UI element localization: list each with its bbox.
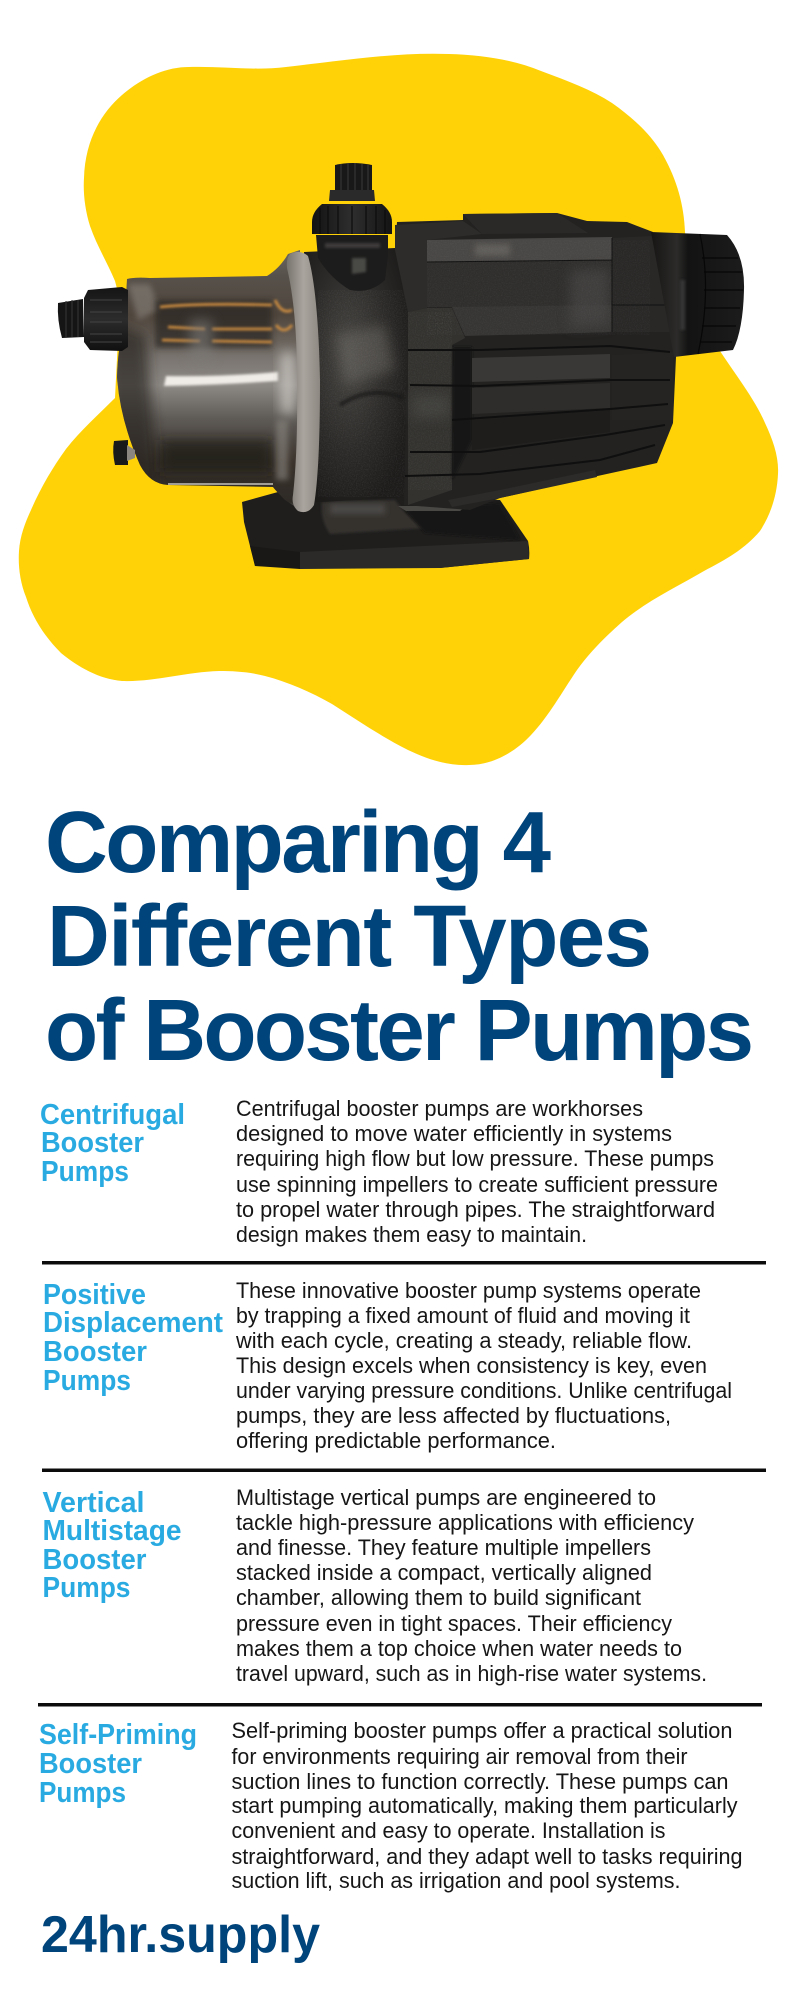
text: centrifugal description: to propel water through pipes. The straightforward xyxy=(236,1197,715,1222)
flange ring xyxy=(287,252,320,512)
text: positive displacement description: offering predictable performance. xyxy=(236,1428,556,1453)
text: vertical multistage description: and finesse. They feature multiple impellers xyxy=(236,1535,651,1560)
heading: vertical multistage: Vertical xyxy=(42,1487,144,1519)
drain plug xyxy=(113,440,135,465)
text: self-priming description xyxy=(232,1718,742,1893)
text: self-priming description: straightforward, and they adapt well to tasks requiring xyxy=(232,1844,742,1869)
heading: self-priming: Pumps xyxy=(39,1777,126,1809)
motor end cap xyxy=(651,232,744,357)
left inlet fitting xyxy=(58,287,128,351)
stainless steel housing xyxy=(108,250,300,510)
text: positive displacement description: under varying pressure conditions. Unlike centrifugal xyxy=(236,1378,732,1403)
text: positive displacement description: by trapping a fixed amount of fluid and moving it xyxy=(236,1303,690,1328)
text: centrifugal description: designed to move water efficiently in systems xyxy=(236,1121,672,1146)
title: Different Types xyxy=(47,888,652,985)
heading: vertical multistage: Pumps xyxy=(42,1572,130,1604)
heading: positive displacement: Positive xyxy=(43,1279,146,1311)
text: positive displacement description: with each cycle, creating a steady, reliable flow. xyxy=(235,1328,692,1353)
section: self-priming booster pumps xyxy=(39,1718,742,1893)
text: self-priming description: for environments requiring air removal from their xyxy=(232,1744,688,1769)
text: self-priming description: convenient and easy to operate. Installation is xyxy=(232,1818,666,1843)
heading: centrifugal xyxy=(40,1099,185,1188)
heading: self-priming xyxy=(39,1719,197,1809)
text: vertical multistage description: tackle high-pressure applications with efficiency xyxy=(236,1510,694,1535)
text: vertical multistage description: pressure even in tight spaces. Their efficiency xyxy=(236,1611,672,1636)
text: vertical multistage description: stacked inside a compact, vertically aligned xyxy=(236,1560,652,1585)
footer brand: 24hr.supply xyxy=(41,1906,320,1964)
title: Comparing 4 xyxy=(45,794,551,891)
motor housing xyxy=(395,213,676,510)
heading: centrifugal: Centrifugal xyxy=(40,1099,185,1131)
text: self-priming description: start pumping automatically, making them particularly xyxy=(232,1793,738,1818)
yellow blob background xyxy=(19,54,778,765)
heading: positive displacement: Displacement xyxy=(43,1307,223,1339)
heading: centrifugal: Booster xyxy=(41,1127,144,1159)
text: vertical multistage description xyxy=(236,1485,707,1686)
title: of Booster Pumps xyxy=(45,982,754,1079)
heading: positive displacement xyxy=(43,1279,223,1397)
section: centrifugal booster pumps xyxy=(40,1096,718,1247)
section: vertical multistage booster pumps xyxy=(42,1485,707,1686)
text: self-priming description: Self-priming booster pumps offer a practical solution xyxy=(232,1718,732,1743)
heading: vertical multistage: Booster xyxy=(42,1544,146,1576)
heading: self-priming: Self-Priming xyxy=(39,1719,197,1751)
text: positive displacement description: pumps, they are less affected by fluctuations, xyxy=(236,1403,671,1428)
text: centrifugal description xyxy=(236,1096,718,1247)
section: positive displacement booster pumps xyxy=(43,1278,732,1453)
heading: positive displacement: Pumps xyxy=(43,1365,131,1397)
text: self-priming description: suction lift, such as irrigation and pool systems. xyxy=(232,1868,680,1893)
text: centrifugal description: use spinning impellers to create sufficient pressure xyxy=(236,1172,718,1197)
heading: vertical multistage xyxy=(42,1487,182,1604)
text: vertical multistage description: Multistage vertical pumps are engineered to xyxy=(236,1485,656,1510)
text: centrifugal description: requiring high flow but low pressure. These pumps xyxy=(236,1146,714,1171)
heading: vertical multistage: Multistage xyxy=(42,1515,182,1547)
pump photograph illustration xyxy=(58,163,744,569)
volute body xyxy=(304,248,411,503)
text: vertical multistage description: travel upward, such as in high-rise water systems. xyxy=(236,1661,707,1686)
text: vertical multistage description: chamber, allowing them to build significant xyxy=(236,1585,641,1610)
top outlet fitting xyxy=(312,163,392,291)
title xyxy=(45,794,754,1079)
heading: self-priming: Booster xyxy=(39,1748,142,1780)
text: positive displacement description xyxy=(235,1278,732,1453)
mounting foot xyxy=(242,492,529,569)
heading: positive displacement: Booster xyxy=(43,1336,147,1368)
text: centrifugal description: design makes them easy to maintain. xyxy=(236,1222,587,1247)
text: positive displacement description: These innovative booster pump systems operate xyxy=(236,1278,701,1303)
heading: centrifugal: Pumps xyxy=(41,1156,129,1188)
text: self-priming description: suction lines to function correctly. These pumps can xyxy=(232,1769,728,1794)
text: vertical multistage description: makes them a top choice when water needs to xyxy=(236,1636,682,1661)
text: positive displacement description: This design excels when consistency is key, even xyxy=(236,1353,707,1378)
text: centrifugal description: Centrifugal booster pumps are workhorses xyxy=(236,1096,643,1121)
